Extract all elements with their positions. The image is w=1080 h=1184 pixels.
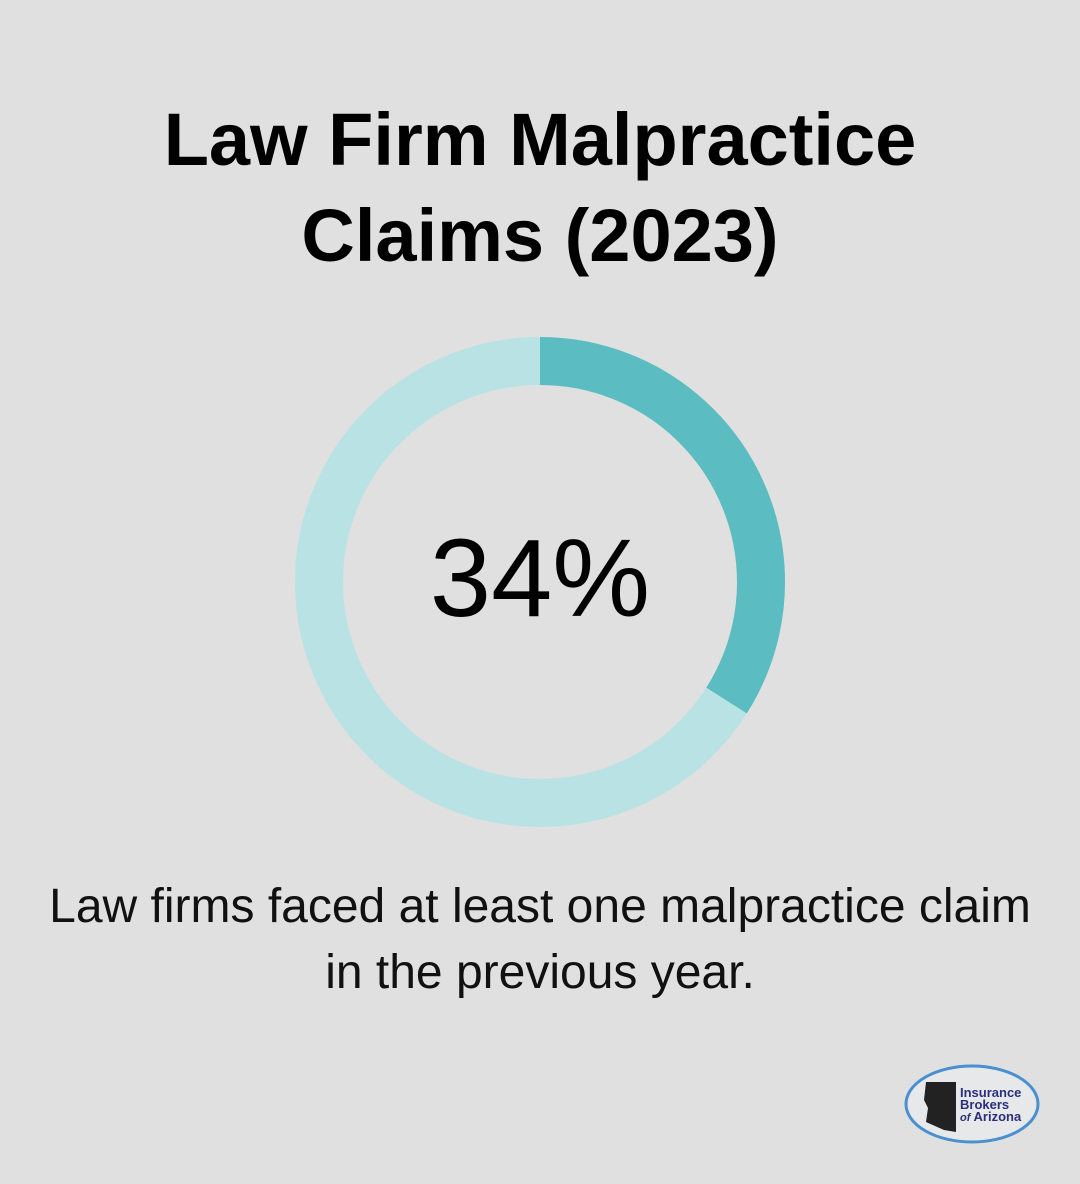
logo: of Arizona <box>960 1109 1022 1124</box>
description <box>49 880 1031 999</box>
title: Law Firm Malpractice <box>164 98 916 181</box>
logo <box>904 1064 1040 1144</box>
description: in the previous year. <box>325 946 755 999</box>
logo: Insurance <box>960 1085 1021 1100</box>
title <box>164 98 916 277</box>
logo: Brokers <box>960 1097 1009 1112</box>
donut chart: 34% <box>430 517 650 640</box>
title: Claims (2023) <box>301 194 779 277</box>
description: Law firms faced at least one malpractice claim <box>49 880 1031 933</box>
